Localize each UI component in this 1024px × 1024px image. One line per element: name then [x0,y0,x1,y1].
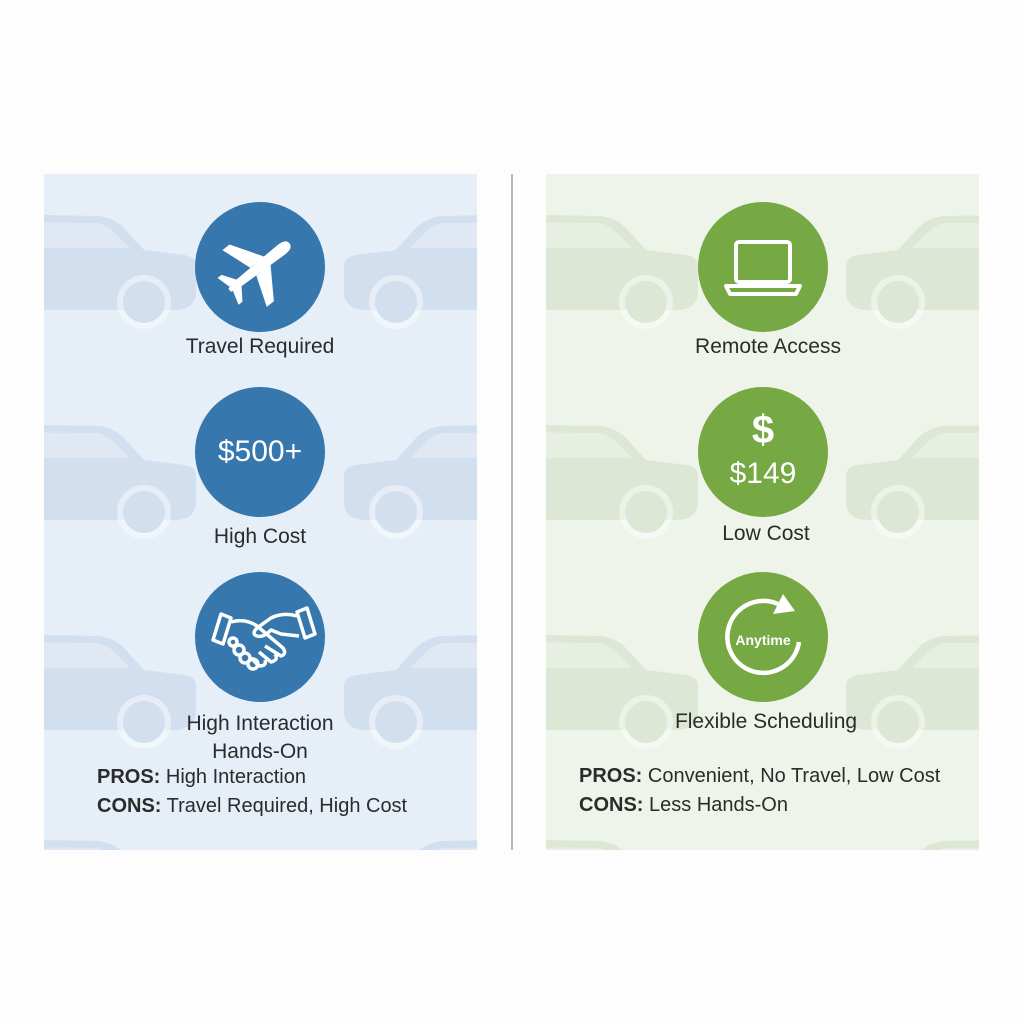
icon: $149 [698,387,828,517]
pros/cons right: PROS: Convenient, No Travel, Low Cost [579,765,940,787]
pros/cons right [579,765,940,816]
pros/cons right: CONS: Less Hands-On [579,794,788,816]
icon: $500+: $500+ [218,435,302,468]
label: high interaction: Hands-On [212,740,308,763]
label: remote access: Remote Access [695,335,841,358]
label: flexible scheduling: Flexible Scheduling [675,710,857,733]
icon: $149: $149 [730,457,796,490]
divider [511,174,513,850]
label: low cost: Low Cost [722,522,810,545]
icon: handshake [195,572,325,702]
label: high cost: High Cost [214,525,306,548]
icon: laptop [698,202,828,332]
icon: anytime cycle [698,572,828,702]
icon: anytime cycle: Anytime [735,632,791,648]
panel: online (right) [546,174,979,850]
icon: $500+ [195,387,325,517]
pros/cons left [97,766,407,817]
panel: in-person (left) [44,174,477,850]
icon: airplane [195,202,325,332]
pros/cons left: PROS: High Interaction [97,766,306,788]
label: high interaction [186,712,334,763]
background car pattern left [44,215,477,850]
background car pattern right [546,215,979,850]
label: high interaction: High Interaction [186,712,334,735]
pros/cons left: CONS: Travel Required, High Cost [97,795,407,817]
label: travel required: Travel Required [186,335,334,358]
icon: $149: $ [752,408,774,452]
